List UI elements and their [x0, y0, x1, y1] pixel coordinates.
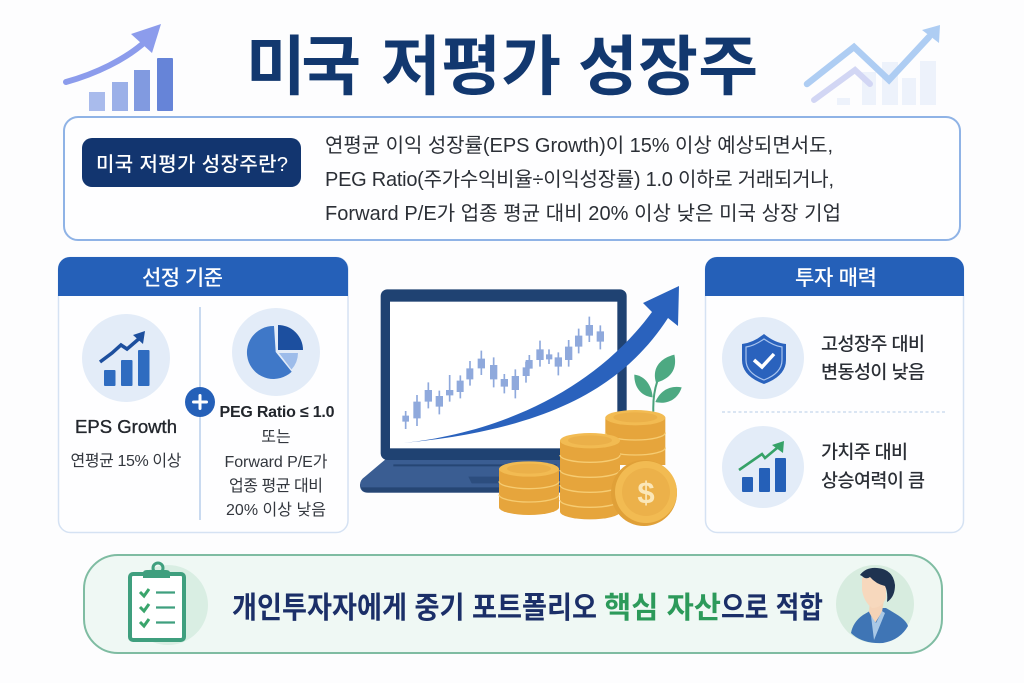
banner: conclusion [84, 555, 942, 653]
laptop [360, 289, 627, 493]
title: 저평가 [381, 30, 561, 103]
PEG ratio text [220, 404, 335, 519]
investment appeal header: 투자 매력 [795, 267, 877, 290]
icon: plus [185, 387, 215, 417]
PEG ratio text: 또는 [261, 428, 291, 446]
appeal text: low volatility: 고성장주 대비 [821, 334, 925, 354]
icon: shield [722, 317, 804, 399]
definition text: PEG Ratio(주가수익비율÷이익성장률) 1.0 이하로 거래되거나, [325, 168, 834, 191]
conclusion text: 으로 적합 [721, 592, 823, 625]
icon: EPS growth chart [82, 314, 170, 402]
panel: selection criteria [58, 257, 348, 532]
plant [634, 355, 682, 412]
PEG ratio text: 20% 이상 낮음 [226, 501, 326, 519]
panel: investment appeal [705, 257, 964, 532]
definition text: 연평균 이익 성장률(EPS Growth)이 15% 이상 예상되면서도, [325, 134, 833, 157]
selection criteria header: 선정 기준 [142, 267, 223, 290]
appeal text: upside potential: 가치주 대비 [821, 442, 908, 462]
candlestick chart [402, 317, 604, 429]
PEG ratio text: PEG Ratio ≤ 1.0 [220, 404, 335, 421]
appeal text: upside potential: 상승여력이 큼 [821, 470, 925, 491]
icon: rising bar chart, top left [66, 24, 173, 111]
icon: upside chart [722, 426, 804, 508]
PEG ratio text: Forward P/E가 [224, 453, 328, 471]
conclusion text: 핵심 자산 [604, 592, 721, 625]
title: 미국 [246, 30, 361, 103]
appeal text: upside potential [821, 442, 925, 491]
title: 성장주 [578, 30, 758, 103]
conclusion text: 개인투자자에게 중기 포트폴리오 [232, 592, 597, 625]
PEG ratio text: 업종 평균 대비 [229, 477, 323, 495]
illustration: laptop, growth arrow and coins [360, 286, 682, 526]
appeal text: low volatility [821, 334, 925, 382]
icon: faint line chart, top right [807, 25, 940, 105]
definition text [325, 134, 841, 225]
growth arrow [403, 286, 679, 443]
selection criteria header [58, 257, 348, 296]
conclusion text [232, 592, 823, 625]
coin stacks [499, 410, 665, 519]
definition text: Forward P/E가 업종 평균 대비 20% 이상 낮은 미국 상장 기업 [325, 202, 841, 225]
title [246, 30, 758, 103]
definition label pill: 미국 저평가 성장주란? [96, 153, 288, 176]
dollar coin: $ [637, 475, 655, 510]
appeal text: low volatility: 변동성이 낮음 [821, 362, 925, 382]
icon: PEG pie chart [232, 308, 320, 396]
icon: investor portrait [836, 565, 914, 643]
EPS growth text [70, 416, 182, 470]
icon: checklist clipboard [128, 563, 208, 645]
panel: definition [64, 117, 960, 240]
investment appeal header [705, 257, 964, 296]
EPS growth text: EPS Growth [75, 416, 177, 437]
EPS growth text: 연평균 15% 이상 [70, 452, 182, 470]
dollar coin [611, 460, 677, 526]
definition label pill [82, 138, 301, 187]
